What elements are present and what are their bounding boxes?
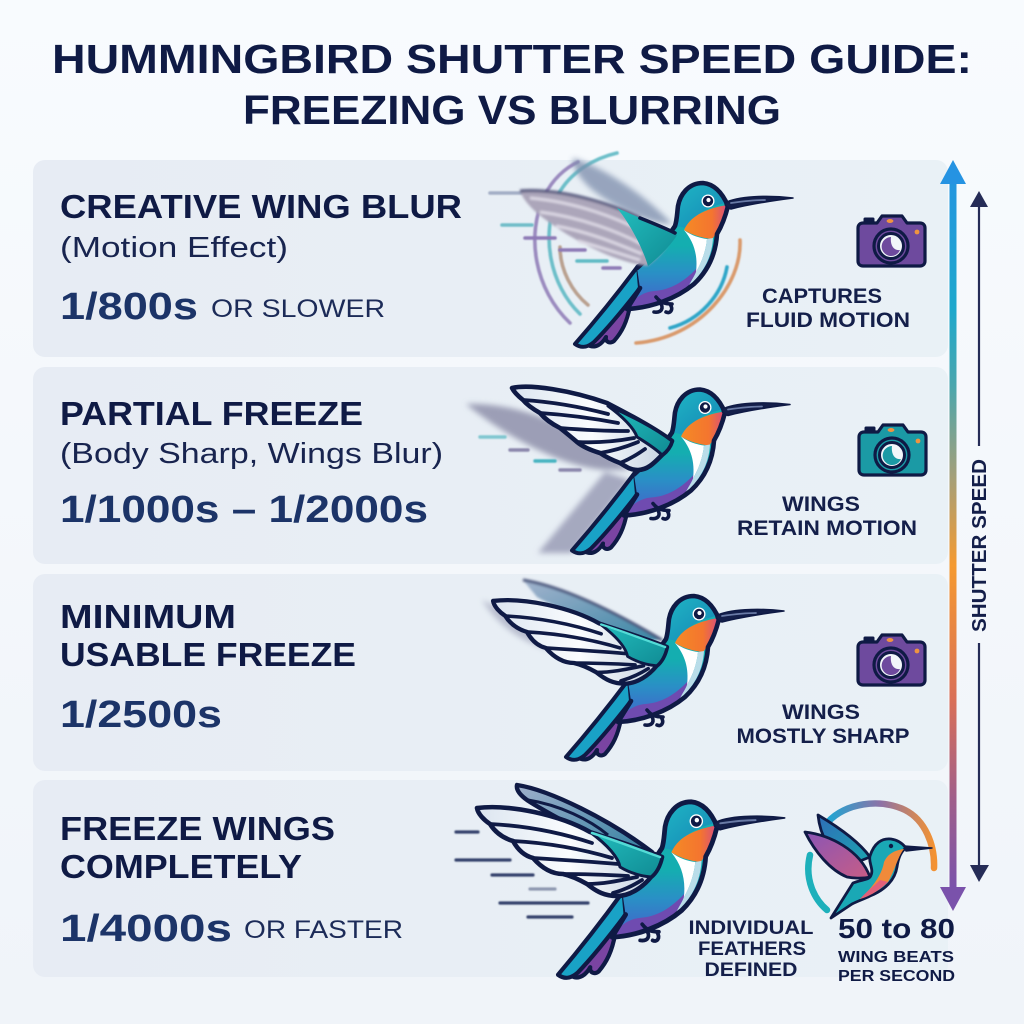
gauge arc	[828, 804, 934, 868]
hummingbird back wing blurred	[573, 158, 672, 224]
caption line 1: CAPTURES	[762, 285, 882, 308]
arrow head top	[940, 160, 966, 184]
caption	[737, 493, 917, 540]
panel background	[33, 160, 948, 357]
hummingbird back wing	[523, 580, 662, 640]
wing beat gauge with mini hummingbird	[805, 804, 934, 918]
caption	[736, 701, 910, 748]
caption line 2: MOSTLY SHARP	[736, 725, 910, 748]
shutter speed axis	[969, 191, 991, 882]
hummingbird sharp wing	[512, 387, 672, 470]
heading line 1: FREEZE WINGS	[60, 810, 335, 847]
gauge arc lower	[808, 855, 827, 910]
hummingbird back wing	[517, 785, 652, 856]
axis top arrowhead	[970, 191, 988, 207]
motion arcs	[535, 153, 740, 343]
mini beak	[904, 846, 932, 851]
shutter value: 1/4000s	[60, 908, 232, 950]
heading line 1: MINIMUM	[60, 598, 236, 635]
arrow shaft	[950, 178, 956, 890]
heading: PARTIAL FREEZE	[60, 395, 363, 432]
panel background	[33, 367, 948, 564]
mini eye	[889, 844, 893, 848]
hummingbird blurred wing	[520, 191, 673, 266]
stat label line 2: PER SECOND	[838, 968, 955, 985]
panel background	[33, 574, 948, 771]
mini back wing	[818, 815, 870, 865]
mini throat	[860, 849, 904, 899]
caption line 2: FLUID MOTION	[746, 309, 910, 332]
title line 1: HUMMINGBIRD SHUTTER SPEED GUIDE:	[52, 36, 972, 82]
motion streaks	[480, 437, 580, 470]
subheading: (Body Sharp, Wings Blur)	[60, 438, 443, 470]
hummingbird body	[558, 802, 785, 978]
axis lower	[978, 643, 980, 868]
mini body	[831, 839, 906, 918]
heading line 2: USABLE FREEZE	[60, 636, 356, 673]
camera icon purple	[858, 216, 925, 266]
speed lines	[456, 832, 588, 917]
panel: freeze wings completely	[33, 780, 955, 985]
panel: partial freeze	[33, 367, 948, 564]
caption line 2: RETAIN MOTION	[737, 517, 917, 540]
camera icon purple	[858, 635, 925, 685]
caption line 3: DEFINED	[704, 960, 798, 981]
axis bottom arrowhead	[970, 865, 989, 882]
wing leading edge	[640, 218, 675, 233]
caption line 1: WINGS	[782, 701, 860, 724]
gradient shutter speed arrow	[940, 160, 966, 911]
motion streaks	[490, 193, 620, 268]
hummingbird sharp wing	[493, 600, 667, 684]
wing beat stat	[838, 913, 955, 985]
axis upper	[978, 205, 980, 446]
hummingbird sharp wing	[477, 807, 662, 896]
caption line 1: INDIVIDUAL	[688, 918, 814, 939]
wing covert	[617, 208, 677, 266]
shutter qualifier: OR FASTER	[244, 916, 403, 944]
panel: creative wing blur	[33, 153, 948, 357]
axis label: SHUTTER SPEED	[969, 459, 991, 632]
mini front wing	[805, 832, 870, 878]
hummingbird body	[572, 390, 790, 553]
panel: minimum usable freeze	[33, 574, 948, 771]
caption line 2: FEATHERS	[698, 939, 806, 960]
heading	[60, 810, 335, 885]
caption line 1: WINGS	[782, 493, 860, 516]
shutter value: 1/800s	[60, 286, 198, 328]
stat value: 50 to 80	[838, 913, 955, 944]
shutter value: 1/1000s – 1/2000s	[60, 489, 428, 531]
caption	[746, 285, 910, 332]
hummingbird body	[575, 183, 793, 347]
wing and tail motion blur	[466, 404, 630, 553]
shutter qualifier: OR SLOWER	[211, 295, 385, 323]
camera icon teal	[859, 425, 926, 475]
mini belly	[860, 880, 888, 899]
arrow head bottom	[940, 887, 966, 911]
panel background	[33, 780, 948, 977]
shutter value: 1/2500s	[60, 694, 222, 736]
title	[52, 36, 972, 133]
caption	[688, 918, 814, 981]
title line 2: FREEZING VS BLURRING	[243, 87, 781, 133]
heading: CREATIVE WING BLUR	[60, 188, 462, 225]
subheading: (Motion Effect)	[60, 232, 288, 264]
wing tip blur	[482, 600, 550, 650]
stat label line 1: WING BEATS	[838, 949, 954, 966]
heading line 2: COMPLETELY	[60, 848, 302, 885]
heading	[60, 598, 356, 673]
hummingbird body	[566, 596, 784, 760]
